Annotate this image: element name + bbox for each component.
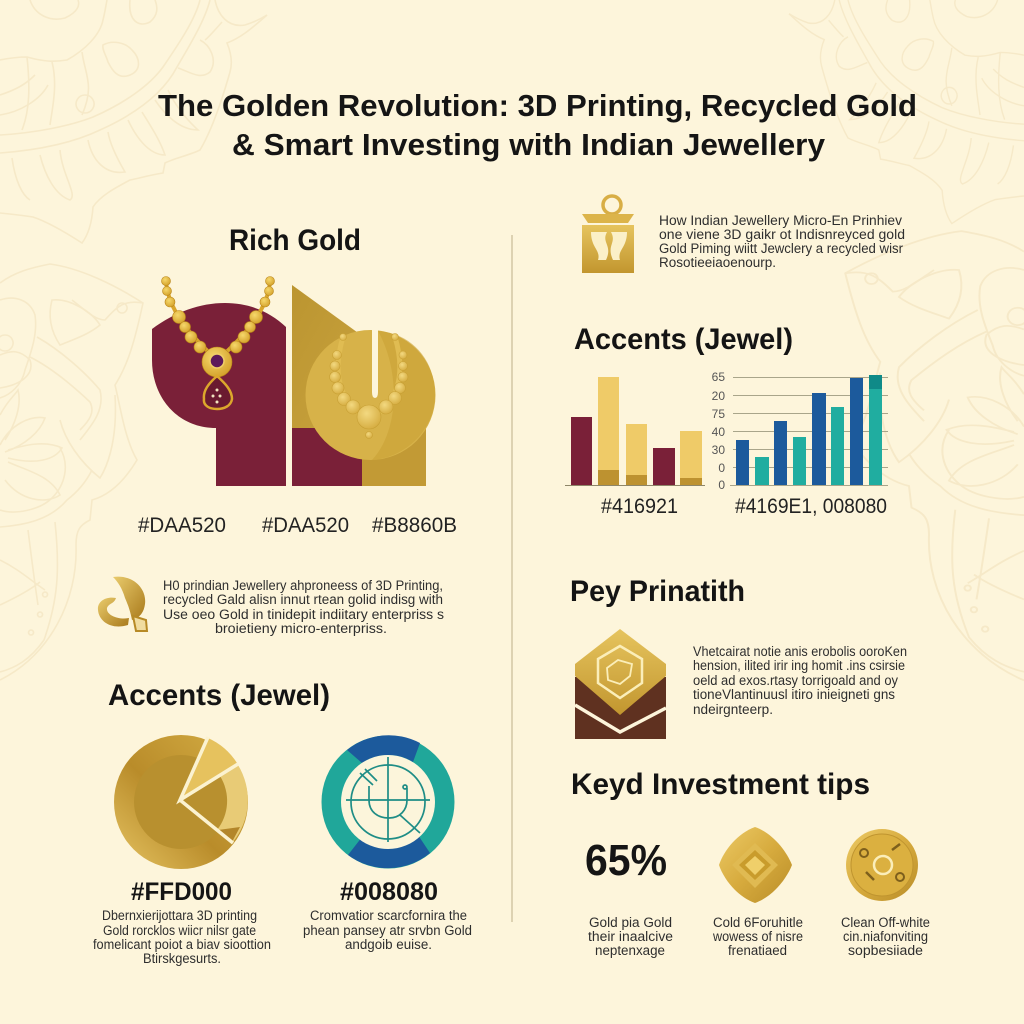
text block: intro left: recycled Gald alisn innut rtean golid indisg with bbox=[163, 592, 443, 607]
text block: teal caption: phean pansey atr srvbn Gold bbox=[303, 923, 472, 938]
caption: tip one: Gold pia Gold bbox=[589, 915, 672, 930]
colour labels: Rich Gold: #DAA520 bbox=[262, 514, 349, 537]
text block: pie caption: Btirskgesurts. bbox=[143, 951, 221, 966]
bar chart: blue and teal: 65 bbox=[712, 370, 725, 384]
caption: tip three: Clean Off-white bbox=[841, 915, 930, 930]
text block: hexagon description: oeld ad exos.rtasy torrigoald and oy bbox=[693, 673, 898, 688]
colour labels: Rich Gold: #DAA520 bbox=[138, 514, 226, 537]
chart label: #416921: #416921 bbox=[601, 495, 678, 518]
text block: hexagon description: hension, ilited irir ing homit .ins csirsie bbox=[693, 658, 905, 673]
bar chart: blue and teal: 40 bbox=[712, 425, 725, 439]
bar chart: blue and teal: 30 bbox=[712, 443, 725, 457]
text block: hexagon description: Vhetcairat notie anis erobolis ooroKen bbox=[693, 644, 907, 659]
caption: tip one bbox=[588, 915, 673, 958]
text block: intro right: How Indian Jewellery Micro-En Prinhiev bbox=[659, 213, 902, 228]
text block: intro right: Gold Piming wiitt Jewclery a recycled wisr bbox=[659, 241, 903, 256]
heading: Pey Prinatith: Pey Prinatith bbox=[570, 575, 745, 608]
caption: tip three: cin.niafonviting bbox=[843, 929, 928, 944]
chart: teal ring dial bbox=[322, 735, 454, 868]
title: The Golden Revolution: 3D Printing, Recycled Gold bbox=[158, 88, 917, 123]
text block: hexagon description: ndeirgnteerp. bbox=[693, 702, 773, 717]
bar chart: blue and teal: 75 bbox=[712, 407, 725, 421]
text block: pie caption bbox=[93, 908, 271, 966]
colour labels: Rich Gold: #B8860B bbox=[372, 514, 457, 537]
caption: tip two: wowess of nisre bbox=[712, 929, 803, 944]
text block: teal caption: andgoib euise. bbox=[345, 937, 432, 952]
text block: teal caption: Cromvatior scarcfornira the bbox=[310, 908, 467, 923]
gold geometric shapes bbox=[292, 285, 436, 486]
heading: Rich Gold: Rich Gold bbox=[229, 224, 361, 257]
bar chart: maroon and gold bbox=[565, 377, 705, 486]
icon: gold swirl bbox=[98, 577, 147, 631]
bar chart: blue and teal: 0 bbox=[718, 461, 725, 475]
caption: tip three: sopbesiiade bbox=[848, 943, 923, 958]
text block: pie caption: fomelicant poiot a biav sioottion bbox=[93, 937, 271, 952]
text block: intro right bbox=[659, 213, 905, 270]
caption: tip one: their inaalcive bbox=[588, 929, 673, 944]
caption: tip two: Cold 6Foruhitle bbox=[713, 915, 803, 930]
bar chart: blue and teal: 20 bbox=[712, 389, 725, 403]
colour labels: Rich Gold bbox=[138, 514, 457, 537]
value: #008080: #008080 bbox=[340, 878, 438, 906]
icon: gold pendant box bbox=[582, 196, 634, 273]
bar chart: blue and teal: 0 bbox=[718, 478, 725, 492]
text block: pie caption: Gold rorcklos wiicr nilsr gate bbox=[103, 923, 256, 938]
caption: tip two: frenatiaed bbox=[728, 943, 787, 958]
necklace left bbox=[162, 276, 274, 409]
caption: tip two bbox=[712, 915, 803, 958]
text block: intro left: broietieny micro-enterpriss. bbox=[215, 621, 387, 636]
chart: gold pie bbox=[114, 735, 248, 869]
pie wedge: pale ring bbox=[180, 765, 248, 842]
heading: Accents right: Accents (Jewel) bbox=[574, 323, 793, 356]
icon: gold hexagon on brown envelope bbox=[575, 629, 666, 739]
stat: 65%: 65% bbox=[585, 836, 667, 885]
text block: intro left: Use oeo Gold in tinidepit indiitary enterpriss s bbox=[163, 607, 444, 622]
panel: necklace composition bbox=[152, 276, 436, 486]
icon: gold coin bbox=[846, 829, 918, 901]
text block: pie caption: Dbernxierijottara 3D printing bbox=[102, 908, 257, 923]
text block: intro right: one viene 3D gaikr ot Indisnreyced gold bbox=[659, 227, 905, 242]
chart label: #4169E1, 008080: #4169E1, 008080 bbox=[735, 495, 887, 518]
text block: hexagon description bbox=[693, 644, 907, 717]
text block: hexagon description: tioneVlantinuusl itiro inieigneti gns bbox=[693, 687, 895, 702]
icon: gold gem bbox=[719, 827, 792, 903]
title: & Smart Investing with Indian Jewellery bbox=[232, 127, 826, 162]
bar chart: blue and teal bbox=[712, 370, 888, 492]
text block: intro left bbox=[163, 578, 444, 636]
value: #FFD000: #FFD000 bbox=[131, 878, 232, 906]
text block: intro right: Rosotieeiaoenourp. bbox=[659, 255, 776, 270]
heading: investment tips: Keyd Investment tips bbox=[571, 768, 870, 801]
necklace right bbox=[330, 334, 408, 438]
maroon shape bbox=[152, 303, 286, 486]
title bbox=[158, 88, 917, 162]
heading: Accents left: Accents (Jewel) bbox=[108, 679, 330, 712]
caption: tip three bbox=[841, 915, 930, 958]
text block: teal caption bbox=[303, 908, 472, 952]
caption: tip one: neptenxage bbox=[595, 943, 665, 958]
pie wedge: light gold bbox=[180, 738, 237, 800]
text block: intro left: H0 prindian Jewellery ahproneess of 3D Printing, bbox=[163, 578, 443, 593]
